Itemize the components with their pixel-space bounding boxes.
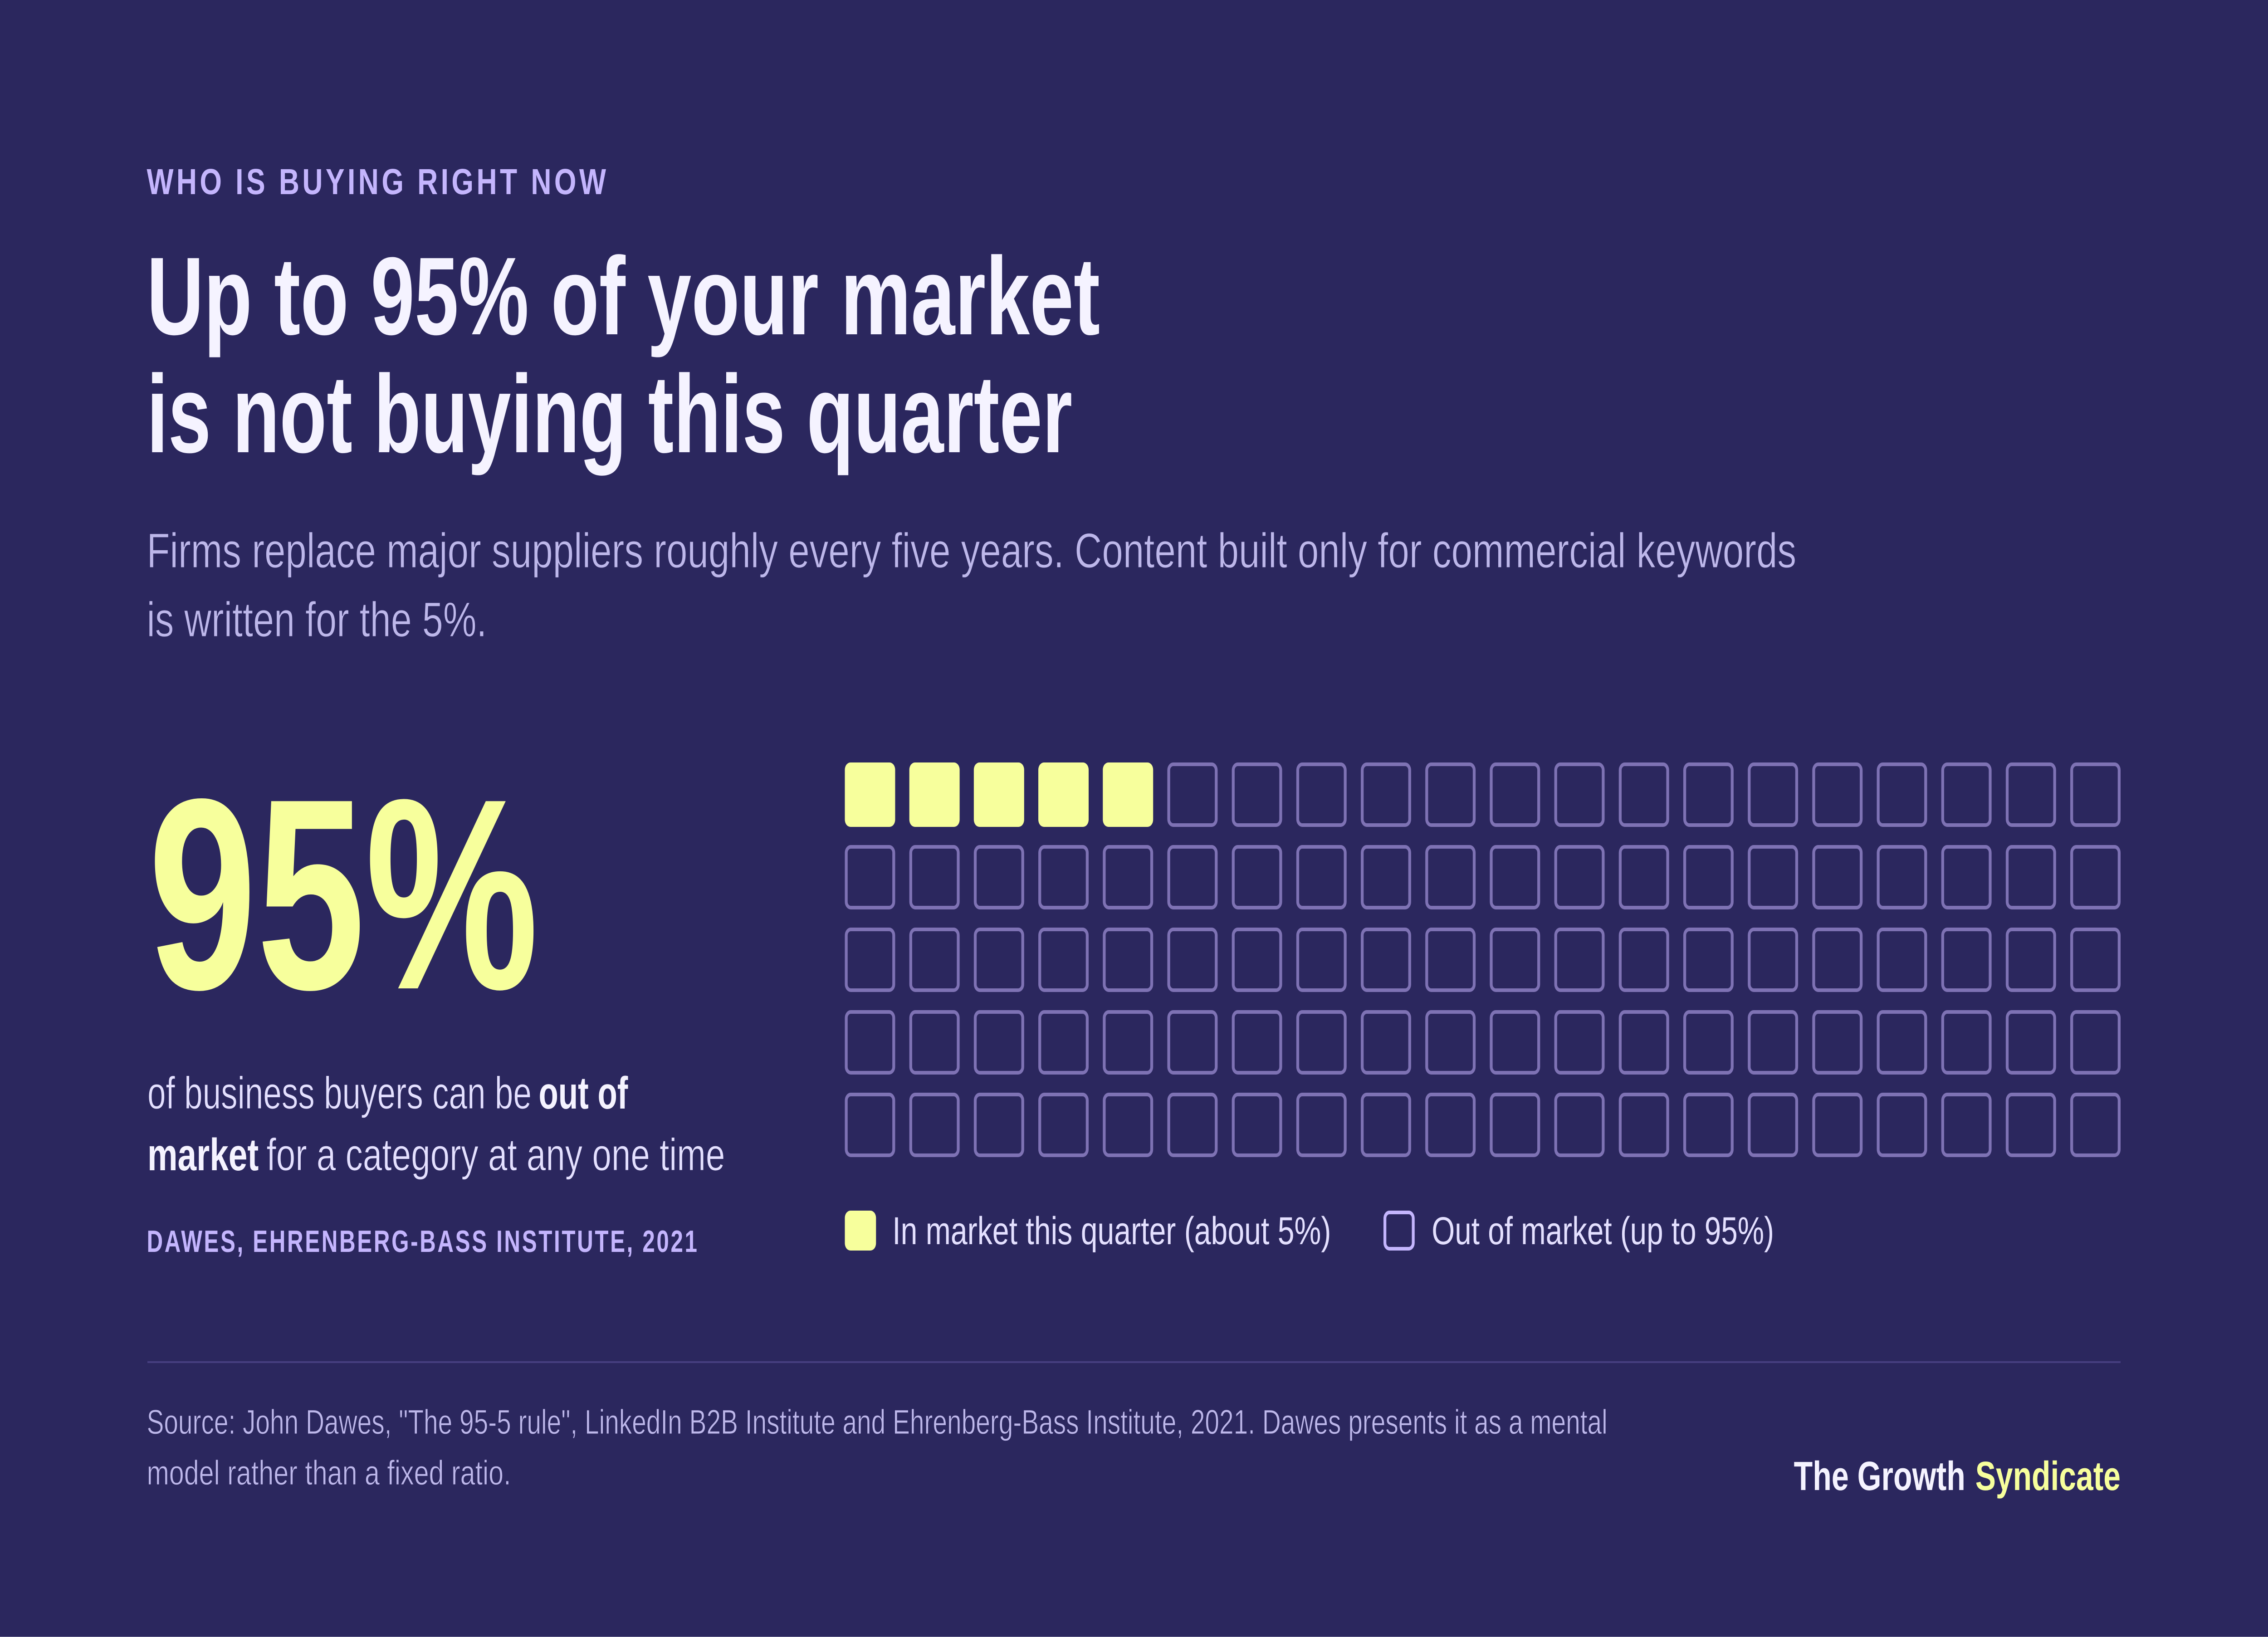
title: Up to 95% of your market bbox=[147, 234, 1100, 358]
big stat: 95%: 95% bbox=[148, 743, 539, 1046]
title: is not buying this quarter bbox=[147, 352, 1072, 476]
legend swatch: out of market bbox=[1385, 1212, 1413, 1249]
waffle chart: 5 in market, 95 out of market bbox=[845, 762, 2119, 1155]
eyebrow: WHO IS BUYING RIGHT NOW bbox=[147, 161, 606, 202]
legend bbox=[845, 1209, 1774, 1253]
legend label: out of market: Out of market (up to 95%) bbox=[1432, 1209, 1774, 1253]
legend swatch: in market bbox=[845, 1211, 876, 1251]
stat attribution: DAWES, EHRENBERG-BASS INSTITUTE, 2021 bbox=[147, 1224, 699, 1259]
brand: Syndicate bbox=[1975, 1454, 2121, 1499]
brand bbox=[1794, 1454, 2121, 1499]
stat caption: out of bbox=[539, 1068, 628, 1119]
subtitle: Firms replace major suppliers roughly every five years. Content built only for commercial keywords bbox=[147, 523, 1796, 578]
legend label: in market: In market this quarter (about 5%) bbox=[892, 1209, 1331, 1253]
source note: model rather than a fixed ratio. bbox=[147, 1454, 511, 1492]
brand: The Growth bbox=[1794, 1454, 1965, 1499]
stat caption bbox=[147, 1068, 725, 1180]
source note bbox=[147, 1403, 1608, 1492]
in-market squares bbox=[845, 762, 1153, 827]
stat caption: for a category at any one time bbox=[267, 1129, 725, 1180]
out-of-market squares bbox=[846, 764, 2119, 1155]
subtitle: is written for the 5%. bbox=[147, 592, 487, 647]
stat caption: market bbox=[147, 1129, 259, 1180]
stat caption: of business buyers can be bbox=[147, 1068, 532, 1119]
subtitle bbox=[147, 523, 1796, 647]
title bbox=[147, 234, 1100, 476]
source note: Source: John Dawes, "The 95-5 rule", LinkedIn B2B Institute and Ehrenberg-Bass Institute, 2021. Dawes presents it as a mental bbox=[147, 1403, 1608, 1442]
